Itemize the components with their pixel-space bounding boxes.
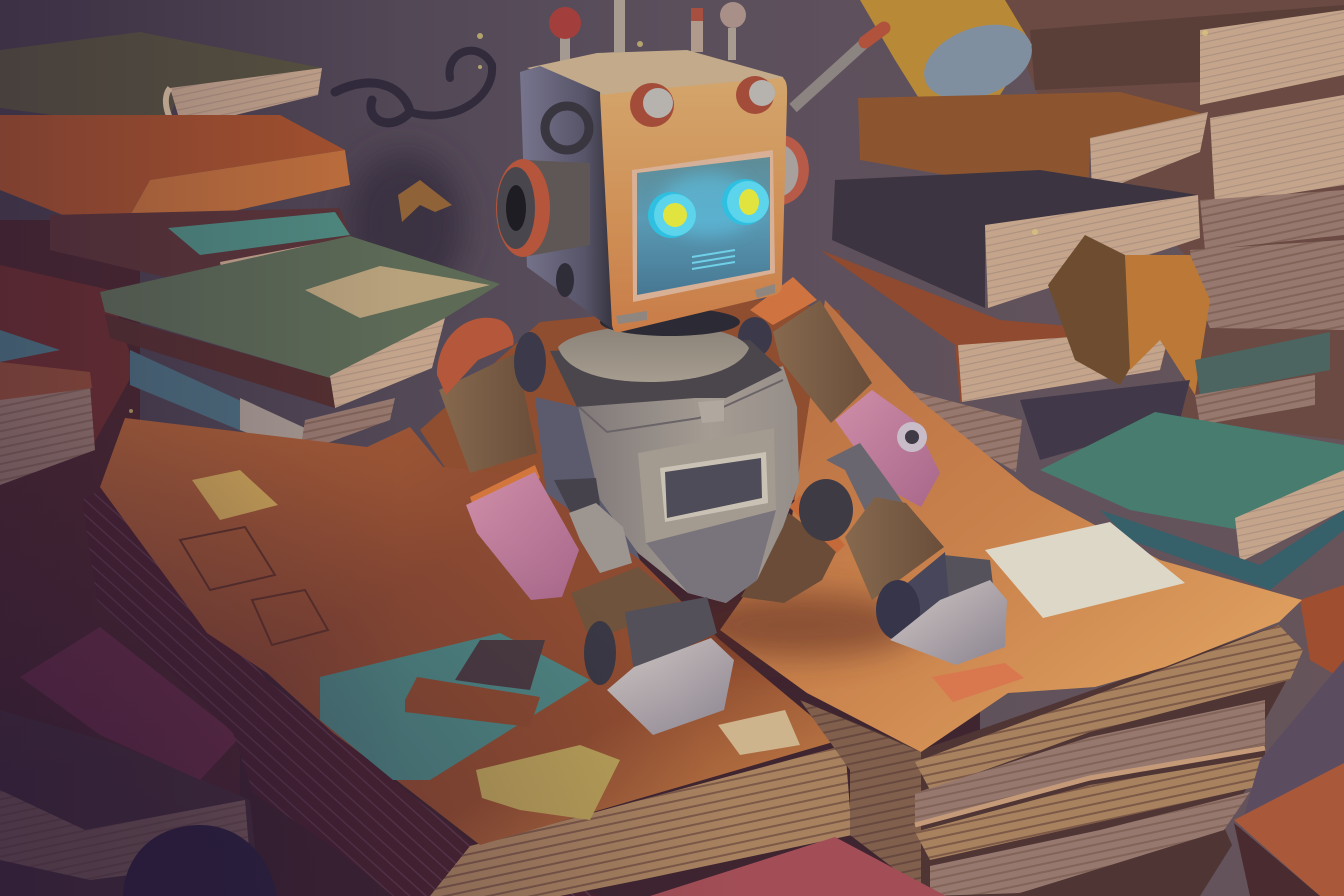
top green book — [0, 32, 322, 135]
top orange sheet — [720, 300, 1302, 752]
side ring — [545, 106, 589, 150]
face glow — [660, 173, 756, 237]
dark collar — [550, 340, 782, 407]
rolled red book — [20, 627, 240, 780]
dark speckled book — [832, 170, 1200, 308]
antennas — [549, 0, 884, 126]
maroon book with teal strip — [50, 208, 352, 290]
right floor — [1240, 660, 1344, 830]
vent slots — [616, 284, 775, 324]
torn paper scrap on wall — [398, 180, 452, 222]
right eye — [722, 179, 769, 225]
head bolts — [630, 76, 775, 127]
pages of bottom left book — [0, 790, 250, 880]
screen — [632, 150, 775, 302]
open notes paper — [985, 522, 1185, 618]
small device on teal paper — [405, 640, 545, 727]
green book right — [1040, 412, 1344, 590]
dark round shape — [123, 825, 277, 896]
glowing dust — [129, 30, 1208, 413]
head front — [600, 78, 787, 332]
torso — [535, 325, 799, 603]
back right column — [1000, 0, 1344, 440]
mouth — [692, 250, 735, 269]
chest display frame — [660, 452, 768, 522]
chest clasp — [698, 400, 724, 423]
upper tan pages — [915, 625, 1303, 790]
top orange sheet — [100, 418, 840, 845]
left ear — [496, 159, 590, 257]
yellow note — [476, 745, 620, 820]
middle mauve pages — [915, 700, 1265, 825]
right ear — [783, 135, 809, 205]
head side — [520, 66, 613, 330]
teal paper — [320, 633, 590, 780]
rolled yellow book — [860, 0, 1042, 113]
robot — [437, 0, 1007, 735]
middle tan edge — [915, 748, 1265, 825]
left arm — [437, 318, 579, 600]
right forearm pink — [835, 390, 940, 507]
right arm upper — [738, 277, 872, 423]
bottom red book — [650, 837, 946, 896]
page block behind right sheet — [890, 385, 1022, 472]
dome neck — [558, 325, 749, 382]
chest plate — [638, 428, 776, 543]
belly shade — [646, 510, 776, 603]
head — [496, 0, 884, 332]
left foot — [607, 638, 734, 735]
blue book — [130, 350, 395, 455]
lower left books — [0, 627, 277, 896]
torn cover, orange side — [1125, 255, 1210, 395]
lower tan pages — [915, 757, 1262, 860]
lowest mauve pages — [930, 792, 1250, 896]
left ankle — [584, 597, 717, 685]
neck shadow — [600, 308, 740, 336]
label tag — [718, 710, 800, 755]
left book stack — [0, 32, 500, 896]
torn cover, brown side — [1048, 235, 1135, 385]
brown book — [858, 92, 1208, 200]
head top — [527, 50, 787, 95]
right foot — [890, 580, 1007, 665]
body shell — [577, 366, 799, 603]
left edge red books — [0, 265, 135, 485]
lower left dark base — [0, 500, 980, 896]
stacked page edges, dark base — [800, 625, 1303, 896]
stacked page edges, left side — [82, 490, 600, 896]
wall shadow blob — [345, 150, 465, 300]
faint drawn boxes — [180, 527, 328, 645]
side hole — [556, 263, 574, 297]
wall swirl ornament — [335, 51, 492, 123]
stamp — [932, 663, 1024, 702]
left paper pile — [82, 418, 852, 896]
right ankle — [876, 552, 993, 640]
bottom dark book — [0, 710, 260, 896]
right paper pile — [720, 300, 1303, 896]
stacked page edges, front side — [430, 745, 852, 896]
background dark books, left edge — [0, 220, 240, 896]
orange book — [0, 115, 350, 237]
red-brown book — [820, 250, 1170, 402]
far right floor books — [1300, 585, 1344, 680]
teal small books — [1020, 332, 1330, 460]
right ear inner — [783, 145, 798, 196]
right book stack — [820, 0, 1344, 680]
table surface behind robot — [420, 300, 860, 660]
left flank — [535, 397, 640, 560]
left leg — [571, 567, 680, 640]
left eye — [648, 192, 696, 238]
right leg — [741, 495, 845, 603]
bottom right red book — [1234, 763, 1344, 896]
left side page edges — [800, 700, 930, 896]
sticky note — [192, 470, 278, 520]
left hand — [554, 478, 632, 573]
chest display — [665, 458, 762, 518]
right hand clamp — [799, 443, 906, 541]
shadow of robot — [680, 593, 920, 657]
large green book — [100, 236, 500, 408]
torso ridge line — [579, 380, 783, 432]
right lower leg — [845, 497, 944, 600]
